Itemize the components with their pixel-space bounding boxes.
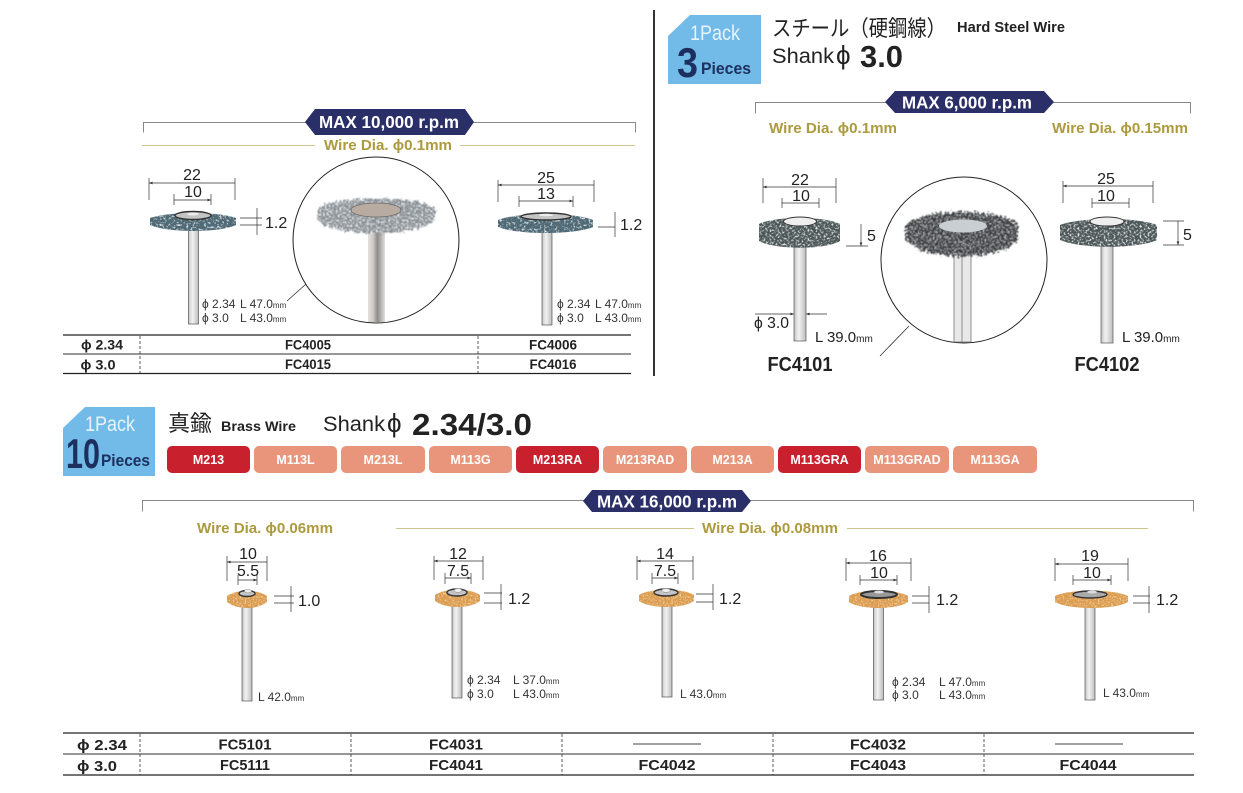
heading [772, 16, 1065, 74]
brush FC4032/FC4043 [846, 548, 986, 702]
badge: MAX 10,000 r.p.m: MAX 10,000 r.p.m [319, 112, 459, 132]
wire diameter label 0.06mm: Wire Dia. ϕ0.06mm [197, 520, 333, 537]
product table: FC4032 [850, 736, 906, 754]
brush FC4005/FC4015: ϕ 2.34 [202, 297, 235, 311]
badge: MAX 10,000 r.p.m [305, 109, 474, 135]
brush FC4101: 10 [792, 188, 810, 205]
brush FC4032/FC4043: mm [972, 679, 986, 688]
product table: FC4041 [429, 757, 483, 774]
product table: ϕ 2.34 [81, 338, 124, 352]
model tags [167, 446, 1037, 473]
wire diameter label 0.08mm: Wire Dia. ϕ0.08mm [702, 520, 838, 537]
model tags: M213RAD [616, 453, 674, 467]
model tags: M213L [364, 453, 403, 467]
brush FC4102 [1060, 171, 1192, 346]
brush FC4005/FC4015: mm [273, 315, 287, 324]
brush FC4032/FC4043: 16 [869, 548, 887, 565]
pack badge: 1 Pack 3 Pieces: 1Pack [690, 22, 740, 45]
brush FC4102: 10 [1097, 188, 1115, 205]
brush FC4101: 22 [791, 172, 809, 189]
product table: ϕ 3.0 [77, 758, 117, 775]
wire diameter label 0.1mm: Wire Dia. ϕ0.1mm [769, 120, 897, 137]
pack badge: 1 Pack 3 Pieces [668, 15, 761, 86]
brush FC4006/FC4016: 13 [537, 186, 555, 203]
detail circle: steel wire close-up [880, 177, 1047, 356]
heading: 真鍮 [168, 411, 212, 436]
brush FC4042: 7.5 [654, 563, 676, 580]
product table: FC4006 [529, 338, 577, 352]
brush FC4006/FC4016: L 47.0 [595, 297, 628, 311]
wire diameter label 0.15mm: Wire Dia. ϕ0.15mm [1052, 120, 1188, 137]
brush FC4101: ϕ 3.0 [754, 315, 789, 332]
brush FC4006/FC4016: ϕ 2.34 [557, 297, 590, 311]
brush FC4005/FC4015: ϕ 3.0 [202, 311, 229, 325]
brush FC4031/FC4041: mm [546, 677, 560, 686]
model tags: M213A [712, 453, 753, 467]
panel: brass wire [63, 407, 1194, 775]
badge: MAX 16,000 r.p.m: MAX 16,000 r.p.m [597, 492, 737, 512]
brush FC4005/FC4015: 10 [184, 184, 202, 201]
brush FC4032/FC4043: ϕ 2.34 [892, 675, 925, 689]
brush FC4032/FC4043: L 47.0 [939, 675, 972, 689]
brush FC4031/FC4041: 7.5 [447, 563, 469, 580]
brush FC4031/FC4041: 12 [449, 546, 467, 563]
product code FC4101: FC4101 [768, 354, 832, 376]
brush FC4031/FC4041: ϕ 3.0 [467, 687, 494, 701]
brush FC4005/FC4015: L 47.0 [240, 297, 273, 311]
pack badge: 1 Pack 10 Pieces: 1Pack [85, 413, 135, 436]
brush FC4032/FC4043: 1.2 [936, 592, 958, 609]
pack badge: 1 Pack 3 Pieces: 3 [677, 39, 698, 86]
brush FC4042: 14 [656, 546, 674, 563]
brush FC4044: 10 [1083, 565, 1101, 582]
brush FC4006/FC4016: 1.2 [620, 217, 642, 234]
brush FC4044: 1.2 [1156, 592, 1178, 609]
brush FC4101 [754, 172, 876, 346]
brush FC4005/FC4015: 1.2 [265, 215, 287, 232]
brush FC4006/FC4016 [498, 170, 642, 325]
product table [63, 335, 631, 374]
brush FC4031/FC4041: L 43.0 [513, 687, 546, 701]
brush FC4005/FC4015: 22 [183, 167, 201, 184]
brush FC4032/FC4043: mm [972, 692, 986, 701]
brush FC4031/FC4041 [434, 546, 560, 701]
product table: FC4015 [285, 357, 331, 372]
brush FC4031/FC4041: mm [546, 691, 560, 700]
heading: Shank [323, 413, 386, 436]
brush FC4101: L 39.0mm [815, 329, 873, 346]
brush FC4031/FC4041: ϕ 2.34 [467, 673, 500, 687]
brush FC4005/FC4015 [149, 167, 287, 325]
product table: FC4043 [850, 757, 906, 774]
product table: FC4044 [1060, 757, 1117, 774]
product table: FC5111 [220, 757, 270, 774]
brush FC4044 [1055, 548, 1178, 700]
brush FC4032/FC4043: ϕ 3.0 [892, 688, 919, 702]
heading: Brass Wire [221, 419, 297, 434]
brush FC4006/FC4016: mm [628, 301, 642, 310]
product table: FC4031 [429, 736, 483, 754]
pack badge: 1 Pack 10 Pieces [63, 407, 155, 477]
brush FC4102: L 39.0mm [1122, 329, 1180, 346]
brush FC4044: L 43.0mm [1103, 686, 1150, 700]
model tags: M213 [193, 453, 224, 467]
brush FC4032/FC4043: L 43.0 [939, 688, 972, 702]
pack badge: 1 Pack 3 Pieces: Pieces [701, 59, 751, 78]
pack badge: 1 Pack 10 Pieces: 10 [66, 430, 100, 477]
product code FC4102: FC4102 [1074, 354, 1140, 376]
brush FC4031/FC4041: 1.2 [508, 591, 530, 608]
brush FC4032/FC4043: 10 [870, 565, 888, 582]
detail circle: steel brush close-up [287, 157, 459, 323]
brush FC5101/FC5111: 5.5 [237, 563, 259, 580]
brush FC4005/FC4015: mm [273, 301, 287, 310]
brush FC4102: 5 [1183, 227, 1192, 244]
heading: スチール（硬鋼線） [772, 16, 946, 41]
wire diameter label: Wire Dia. ϕ0.1mm [324, 137, 452, 154]
model tags: M113GA [970, 453, 1020, 467]
heading: ϕ [836, 40, 851, 70]
brush FC4042: 1.2 [719, 591, 741, 608]
pack badge: 1 Pack 10 Pieces: Pieces [101, 451, 150, 470]
model tags: M113G [450, 453, 491, 467]
heading: Hard Steel Wire [957, 20, 1065, 36]
brush FC4042 [637, 546, 741, 701]
brush FC4042: L 43.0mm [680, 687, 727, 701]
brush FC5101/FC5111: L 42.0mm [258, 690, 305, 704]
panel: hard steel wire 0.1mm, 10,000 rpm [63, 109, 642, 374]
heading [168, 407, 532, 442]
product table: FC4005 [285, 338, 331, 352]
model tags: M113L [276, 453, 315, 467]
badge: MAX 6,000 r.p.m: MAX 6,000 r.p.m [902, 92, 1032, 112]
heading: 2.34/3.0 [412, 407, 532, 442]
rpm bracket [142, 500, 1194, 512]
brush FC4102: 25 [1097, 171, 1115, 188]
brush FC4031/FC4041: L 37.0 [513, 673, 546, 687]
product table: ϕ 2.34 [77, 737, 128, 754]
heading: 3.0 [860, 39, 903, 74]
rpm bracket [144, 122, 636, 132]
product table [63, 733, 1194, 775]
brush FC4006/FC4016: ϕ 3.0 [557, 311, 584, 325]
brush FC4006/FC4016: L 43.0 [595, 311, 628, 325]
brush FC4006/FC4016: mm [628, 315, 642, 324]
brush FC4006/FC4016: 25 [537, 170, 555, 187]
panel: hard steel wire shank 3.0 [668, 15, 1192, 376]
model tags: M113GRA [790, 453, 849, 467]
model tags: M113GRAD [873, 453, 941, 467]
brush FC5101/FC5111: 1.0 [298, 593, 320, 610]
model tags: M213RA [533, 453, 582, 467]
product table: FC5101 [218, 736, 272, 754]
brush FC5101/FC5111: 10 [239, 546, 257, 563]
brush FC4044: 19 [1081, 548, 1099, 565]
product table: FC4042 [638, 757, 696, 774]
rpm bracket [756, 102, 1190, 114]
product table: FC4016 [530, 357, 577, 372]
vertical divider [653, 10, 655, 376]
brush FC5101/FC5111 [227, 546, 320, 704]
brush FC4005/FC4015: L 43.0 [240, 311, 273, 325]
product table: ϕ 3.0 [80, 358, 116, 372]
heading: ϕ [387, 408, 402, 438]
heading: Shank [772, 45, 835, 68]
brush FC4101: 5 [867, 228, 876, 245]
